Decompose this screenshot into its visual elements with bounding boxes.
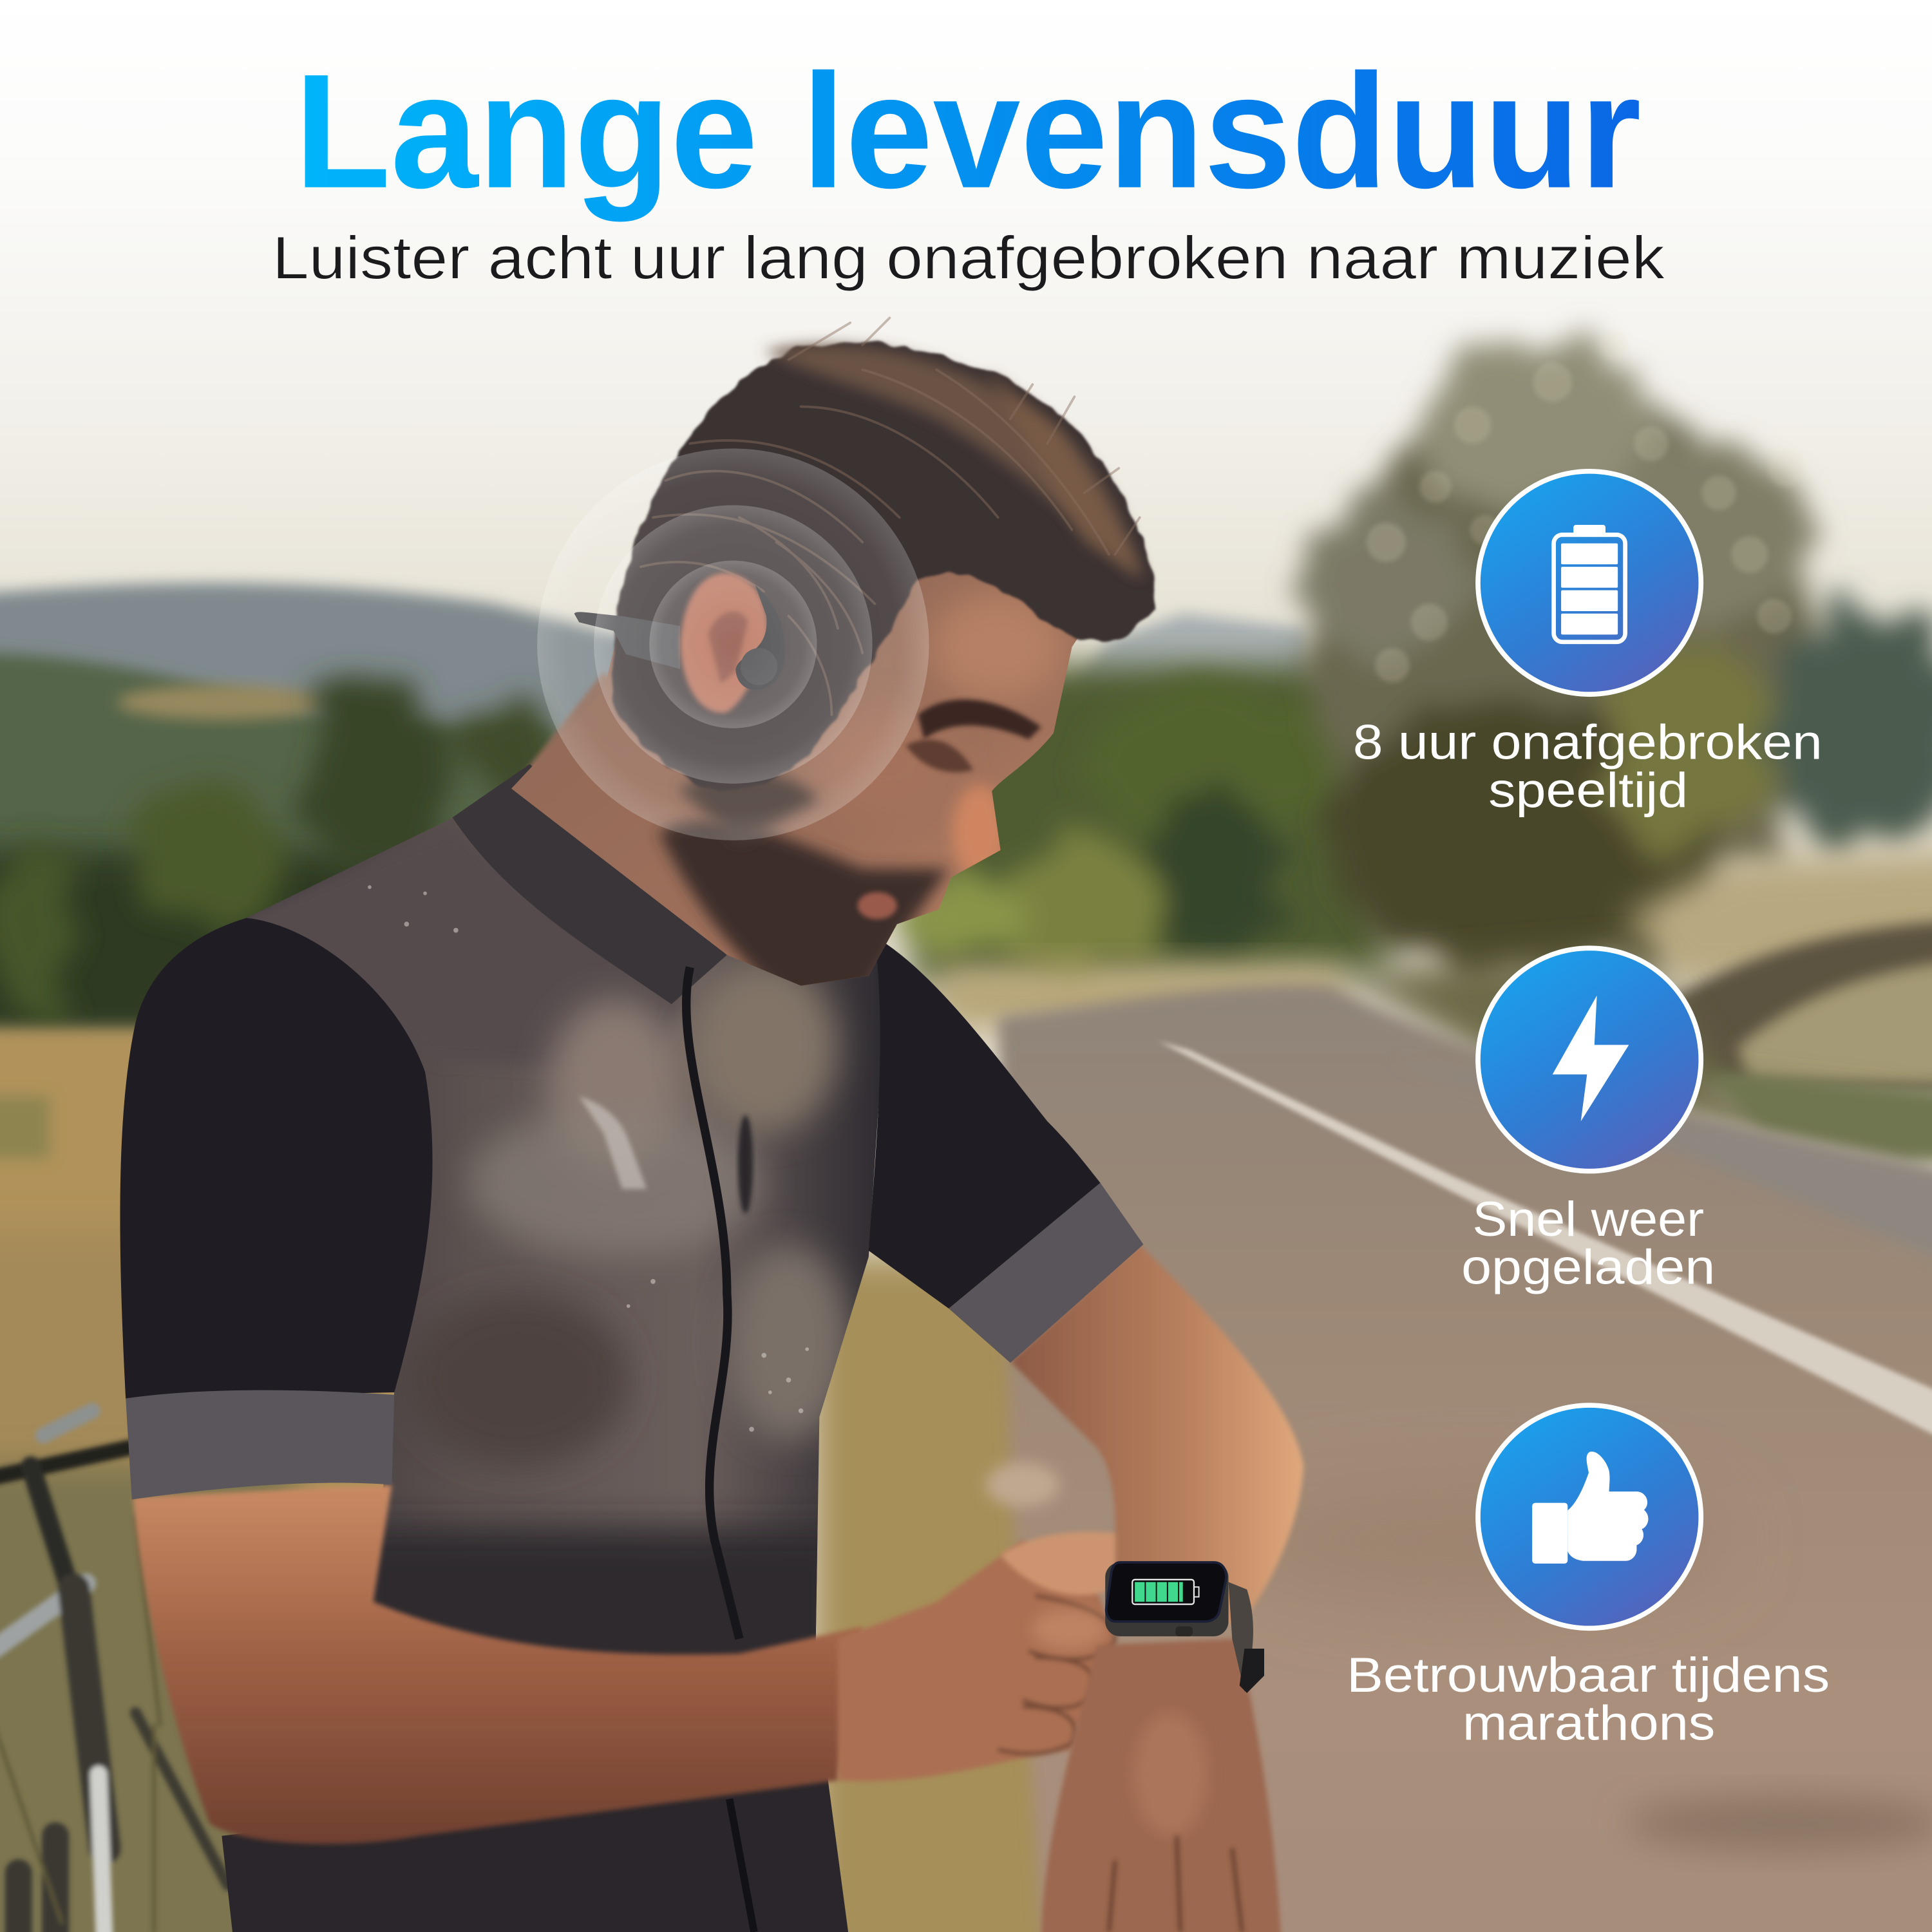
feature: reliable during marathons	[1347, 1405, 1830, 1751]
label: Betrouwbaar tijdens marathons	[1347, 1648, 1830, 1751]
shirt torso	[247, 764, 880, 1658]
bokeh highlights	[1367, 330, 1805, 683]
icon: battery badge	[1478, 471, 1701, 694]
head: face	[511, 571, 1078, 985]
label: Snel weer opgeladen: opgeladen	[1461, 1240, 1715, 1295]
hand and fingers	[838, 1532, 1178, 1781]
hair strands	[641, 318, 1140, 715]
label: 8 uur onafgebroken speeltijd	[1353, 715, 1823, 818]
neck	[511, 672, 788, 973]
man: athlete checking smartwatch	[120, 318, 1303, 1932]
icon: lightning badge	[1478, 948, 1701, 1171]
sweat marks	[368, 886, 809, 1432]
feature: battery playtime	[1353, 471, 1823, 818]
label: Betrouwbaar tijdens marathons: marathons	[1463, 1696, 1715, 1751]
bicycle at lower left	[0, 1411, 228, 1932]
feature: fast charging	[1461, 948, 1715, 1295]
smartwatch	[1105, 1562, 1264, 1693]
label: 8 uur onafgebroken speeltijd: 8 uur onafgebroken	[1353, 715, 1823, 770]
left arm	[133, 1484, 862, 1844]
label: Snel weer opgeladen	[1461, 1192, 1715, 1295]
right sleeve	[869, 936, 1144, 1363]
title: Lange levensduur	[294, 40, 1641, 222]
left sleeve	[120, 918, 433, 1499]
label: Betrouwbaar tijdens marathons: Betrouwbaar tijdens	[1347, 1648, 1830, 1703]
head: hair	[612, 318, 1156, 790]
subtitle: Luister acht uur lang onafgebroken naar muziek	[272, 223, 1665, 291]
icon: thumbs up badge	[1478, 1405, 1701, 1628]
shirt lower torso	[222, 1762, 850, 1932]
sound wave rings	[537, 448, 929, 840]
label: Snel weer opgeladen: Snel weer	[1472, 1192, 1704, 1247]
earpiece headset and ear	[574, 573, 785, 713]
right arm	[1010, 1244, 1303, 1627]
label: 8 uur onafgebroken speeltijd: speeltijd	[1488, 763, 1688, 818]
